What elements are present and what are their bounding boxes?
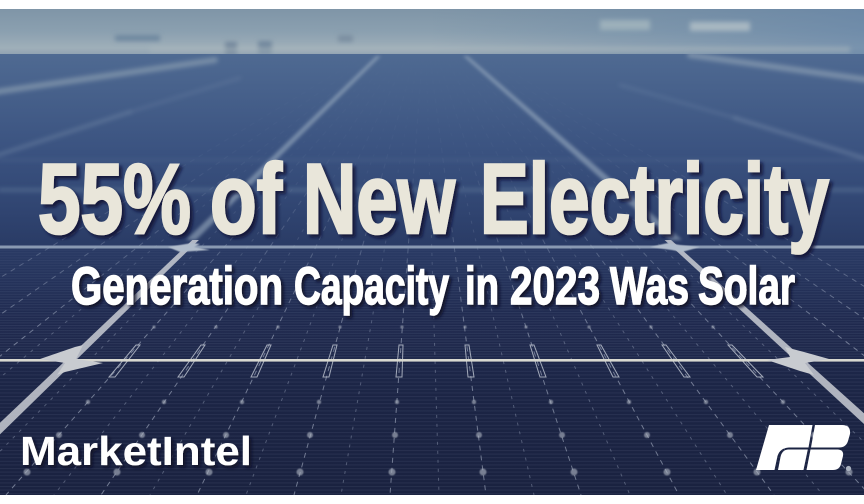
dashed busbar lines <box>0 164 864 495</box>
distant frame lines <box>0 55 864 190</box>
rail junction, left <box>40 345 103 375</box>
sky band <box>0 9 864 55</box>
subtitle: Generation Capacity in 2023 Was Solar: in <box>465 257 499 316</box>
hazy upper diagonal rails <box>186 56 682 240</box>
connector loops at the centre rail <box>109 345 763 377</box>
subtitle: Generation Capacity in 2023 Was Solar: Was <box>610 257 689 316</box>
subtitle: Generation Capacity in 2023 Was Solar: Generation <box>71 257 283 316</box>
rail junction, right <box>767 347 829 375</box>
title: 55% of New Electricity: of <box>210 143 283 254</box>
subtitle: Generation Capacity in 2023 Was Solar: Solar <box>698 257 795 316</box>
cell strip texture <box>0 250 864 495</box>
subtitle: Generation Capacity in 2023 Was Solar: Capacity <box>294 257 449 316</box>
horizontal rail, upper <box>0 246 864 248</box>
panel surface <box>0 108 864 495</box>
title: 55% of New Electricity <box>38 143 829 254</box>
title: 55% of New Electricity: 55% <box>38 143 191 254</box>
upper junctions <box>168 243 700 252</box>
brand label: MarketIntel: MarketIntel <box>20 428 252 474</box>
subtitle: Generation Capacity in 2023 Was Solar: 2023 <box>510 257 600 316</box>
icon: FB logo <box>756 425 851 471</box>
title: 55% of New Electricity: New <box>303 143 456 254</box>
haze over distant panels <box>0 54 864 340</box>
subtitle: Generation Capacity in 2023 Was Solar <box>71 257 795 316</box>
solder dots <box>24 325 852 476</box>
main diagonal frame rails <box>0 240 864 434</box>
horizontal rail, centre <box>0 359 864 362</box>
